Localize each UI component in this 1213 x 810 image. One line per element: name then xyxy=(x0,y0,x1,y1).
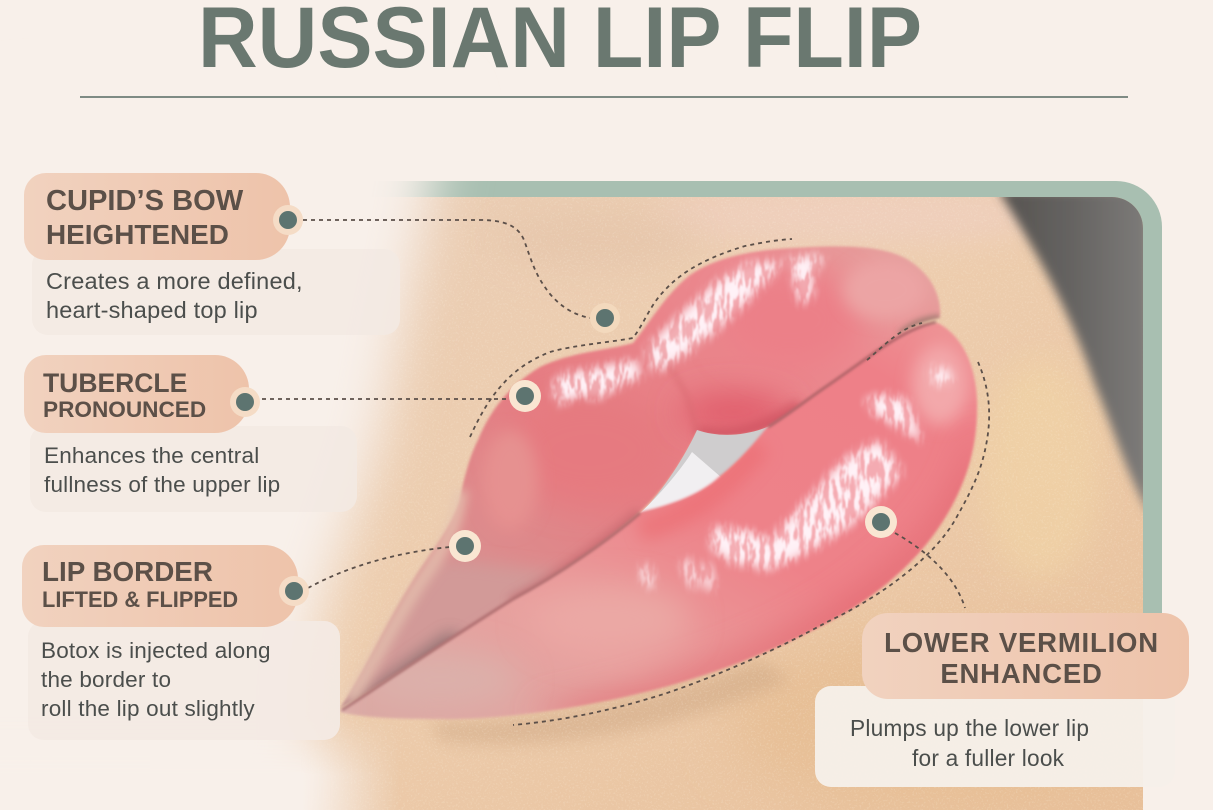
description: lip border: roll the lip out slightly xyxy=(41,696,255,721)
heading: lip border xyxy=(22,545,298,627)
connector dot xyxy=(279,576,309,606)
description: lip border xyxy=(28,621,340,740)
marker: lower vermilion dot xyxy=(865,506,897,538)
description: cupid's bow: Creates a more defined, xyxy=(46,268,303,294)
lower lip xyxy=(330,320,990,730)
left fade xyxy=(0,100,445,810)
marker: tubercle dot xyxy=(509,380,541,412)
description: lower vermilion xyxy=(815,686,1175,787)
connector dot xyxy=(273,205,303,235)
callout: tubercle xyxy=(24,355,357,512)
heading: lower vermilion xyxy=(862,613,1189,699)
heading: cupid's bow: HEIGHTENED xyxy=(46,219,229,250)
connector dot xyxy=(230,387,260,417)
heading: lip border: LIP BORDER xyxy=(42,556,213,587)
description: tubercle: fullness of the upper lip xyxy=(44,472,280,497)
description: tubercle xyxy=(30,426,357,512)
green frame xyxy=(150,181,1162,625)
bottom-left fade xyxy=(150,730,386,810)
title divider xyxy=(80,96,1128,98)
dotted outlines xyxy=(262,220,989,725)
teeth xyxy=(638,425,772,516)
upper lip gloss xyxy=(552,256,825,405)
upper lip xyxy=(330,230,950,720)
mouth line xyxy=(342,322,936,710)
description: lower vermilion: Plumps up the lower lip xyxy=(850,715,1089,741)
heading: lower vermilion: ENHANCED xyxy=(940,658,1103,689)
description: tubercle: Enhances the central xyxy=(44,443,259,468)
heading: lower vermilion: LOWER VERMILION xyxy=(884,627,1159,658)
heading: tubercle: TUBERCLE xyxy=(43,368,187,398)
description: cupid's bow: heart-shaped top lip xyxy=(46,297,258,323)
soft edge: upper lip meets skin xyxy=(350,490,461,700)
lower lip gloss xyxy=(640,368,952,590)
callout: lip border xyxy=(22,545,340,740)
heading: cupid's bow: CUPID’S BOW xyxy=(46,185,243,217)
heading: tubercle: PRONOUNCED xyxy=(43,397,206,422)
top outside cover xyxy=(0,100,1213,181)
heading: lip border: LIFTED & FLIPPED xyxy=(42,587,238,612)
description: cupid's bow xyxy=(32,249,400,335)
marker: cupid's bow dot xyxy=(590,303,620,333)
description: lip border: the border to xyxy=(41,667,171,692)
callout: cupid's bow xyxy=(24,173,400,334)
heading: tubercle xyxy=(24,355,249,433)
hair xyxy=(998,190,1150,515)
heading: cupid's bow xyxy=(24,173,290,260)
description: lower vermilion: for a fuller look xyxy=(912,745,1064,771)
photo panel: lips close-up xyxy=(262,181,1162,810)
marker: lip border dot xyxy=(449,530,481,562)
callout: lower vermilion xyxy=(815,613,1189,787)
description: lip border: Botox is injected along xyxy=(41,638,271,663)
skin xyxy=(150,197,1143,810)
